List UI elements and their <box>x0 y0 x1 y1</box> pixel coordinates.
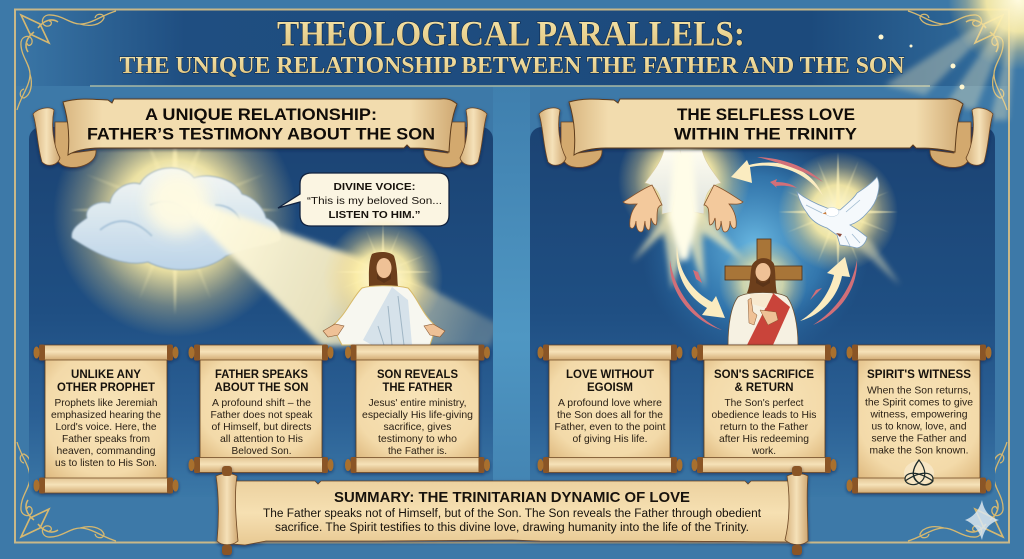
corner ornament: top left <box>17 11 116 110</box>
card: Unlike Any Other Prophet: heaven, commanding <box>56 445 156 457</box>
icon: trinity knot <box>904 460 934 485</box>
card: Son's Sacrifice and Return: & RETURN <box>734 382 794 394</box>
illustration: shining cloud and beam <box>56 148 493 350</box>
card: Son's Sacrifice and Return <box>692 344 836 473</box>
card: Son's Sacrifice and Return: return to the Father <box>720 421 808 433</box>
card: Spirit's Witness <box>846 344 992 494</box>
illustration: Father's hands <box>623 150 743 260</box>
card: Son Reveals the Father <box>345 344 490 473</box>
summary scroll <box>216 466 808 555</box>
card: Love Without Egoism: the Son does all for the <box>557 409 663 421</box>
card: Love Without Egoism: EGOISM <box>587 382 633 394</box>
heading: left panel: A UNIQUE RELATIONSHIP: <box>145 105 377 124</box>
banner: right heading <box>539 99 993 167</box>
summary scroll: The Father speaks not of Himself, but of the Son. The Son reveals the Father through obedient <box>263 508 762 520</box>
card: Unlike Any Other Prophet: Prophets like Jeremiah <box>54 397 158 409</box>
card: Love Without Egoism: A profound love where <box>558 397 662 409</box>
card: Father Speaks About the Son: of Himself, but directs <box>212 421 312 433</box>
card: Son Reveals the Father: testimony to who <box>378 433 457 445</box>
corner ornament: bottom left <box>17 442 116 541</box>
illustration: Trinity circle of love <box>618 114 900 360</box>
illustration: love arrows <box>670 157 857 330</box>
heading: right panel: WITHIN THE TRINITY <box>674 124 858 144</box>
speech bubble: divine voice: “This is my beloved Son... <box>307 195 442 207</box>
card: Love Without Egoism: LOVE WITHOUT <box>566 369 654 381</box>
card: Unlike Any Other Prophet: OTHER PROPHET <box>57 382 155 394</box>
card: Father Speaks About the Son: ABOUT THE SON <box>214 382 308 394</box>
summary scroll: sacrifice. The Spirit testifies to this divine love, drawing humanity into the life of the Trinity. <box>275 522 749 534</box>
corner ornament: bottom right <box>908 442 1007 541</box>
heading: right panel: THE SELFLESS LOVE <box>677 105 855 124</box>
card: Son's Sacrifice and Return: obedience leads to His <box>712 409 816 421</box>
summary scroll: SUMMARY: THE TRINITARIAN DYNAMIC OF LOVE <box>334 489 690 506</box>
card: Unlike Any Other Prophet: Lord's voice. Here, the <box>56 421 157 433</box>
card: Unlike Any Other Prophet: Father speaks from <box>62 433 150 445</box>
main title <box>120 14 905 79</box>
illustration: Jesus with open arms <box>323 218 445 345</box>
card: Love Without Egoism: Father, even to the point <box>554 421 666 433</box>
card: Son Reveals the Father: the Father is. <box>388 445 447 457</box>
sunburst: top right <box>878 0 1024 120</box>
illustration: cross <box>725 239 802 301</box>
card: Spirit's Witness: serve the Father and <box>872 432 967 444</box>
card: Spirit's Witness: When the Son returns, <box>867 384 971 396</box>
card: Father Speaks About the Son: all attention to His <box>220 433 303 445</box>
panel: left background <box>29 127 493 497</box>
main title: THEOLOGICAL PARALLELS: <box>277 14 745 54</box>
card: Son Reveals the Father: sacrifice, gives <box>384 421 452 433</box>
heading: right panel <box>674 105 858 144</box>
illustration: dove <box>797 177 879 248</box>
card: Father Speaks About the Son: A profound shift – the <box>212 397 311 409</box>
card: Unlike Any Other Prophet <box>34 344 178 494</box>
card: Son's Sacrifice and Return: work. <box>751 445 776 457</box>
card: Father Speaks About the Son: FATHER SPEAKS <box>215 369 308 381</box>
illustration: Jesus with heart gesture <box>728 258 798 345</box>
banner: left heading <box>33 99 487 167</box>
card: Spirit's Witness: witness, empowering <box>870 408 968 420</box>
card: Unlike Any Other Prophet: emphasized hearing the <box>51 409 161 421</box>
card: Son's Sacrifice and Return: The Son's perfect <box>724 397 804 409</box>
title band <box>16 10 1008 86</box>
card: Father Speaks About the Son <box>188 344 334 473</box>
card: Love Without Egoism <box>538 344 682 473</box>
centre strip between panels <box>493 86 530 543</box>
corner ornament: top right <box>908 11 1007 110</box>
panel: right background <box>530 127 995 497</box>
card: Father Speaks About the Son: Father does not speak <box>210 409 313 421</box>
card: Son Reveals the Father: SON REVEALS <box>377 369 458 381</box>
card: Son Reveals the Father: Jesus' entire ministry, <box>368 397 466 409</box>
card: Son's Sacrifice and Return: SON'S SACRIFICE <box>714 369 814 381</box>
card: Unlike Any Other Prophet: UNLIKE ANY <box>71 369 141 381</box>
card: Spirit's Witness: SPIRIT'S WITNESS <box>867 369 971 381</box>
speech bubble: divine voice: DIVINE VOICE: <box>334 181 416 193</box>
card: Love Without Egoism: of giving His life. <box>572 433 648 445</box>
card: Father Speaks About the Son: Beloved Son. <box>232 445 292 457</box>
card: Spirit's Witness: make the Son known. <box>870 444 968 456</box>
icon: sparkle watermark <box>965 500 999 540</box>
card: Spirit's Witness: the Spirit comes to give <box>865 396 973 408</box>
card: Unlike Any Other Prophet: us to listen to His Son. <box>55 457 157 469</box>
card: Son Reveals the Father: especially His life-giving <box>362 409 473 421</box>
card: Spirit's Witness: us to know, love, and <box>872 420 967 432</box>
title divider <box>90 85 930 87</box>
card: Son Reveals the Father: THE FATHER <box>382 382 453 394</box>
heading: left panel <box>87 105 435 144</box>
card: Son's Sacrifice and Return: after His redeeming <box>719 433 809 445</box>
main title: THE UNIQUE RELATIONSHIP BETWEEN THE FATHER AND THE SON <box>120 53 905 79</box>
speech bubble: divine voice <box>278 173 449 226</box>
heading: left panel: FATHER’S TESTIMONY ABOUT THE SON <box>87 124 435 144</box>
speech bubble: divine voice: LISTEN TO HIM.” <box>328 209 420 221</box>
